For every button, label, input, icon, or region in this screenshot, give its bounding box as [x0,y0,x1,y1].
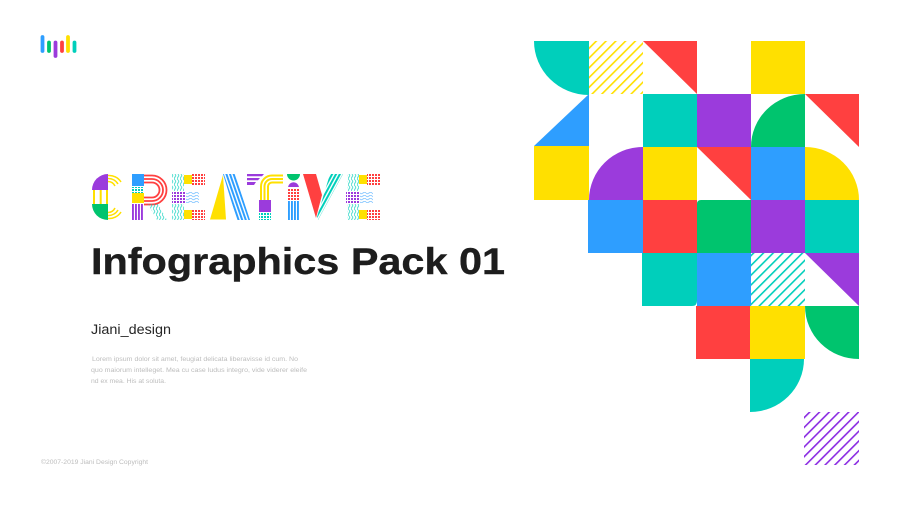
letter A [210,174,250,220]
purple quarter circle [589,147,643,200]
red square [643,200,697,253]
body paragraph [91,356,307,385]
red triangle [805,94,859,147]
letter C [92,174,121,220]
blue triangle [534,94,589,146]
blue square [751,147,805,200]
teal square [805,200,859,253]
teal square [643,94,697,147]
yellow square [643,147,697,200]
blue square [588,200,643,253]
green quarter circle [751,94,805,147]
letter I [287,174,300,220]
logo: colored bars [42,37,74,56]
purple triangle [805,253,859,306]
body paragraph: quo maiorum intelleget. Mea cu case ludus integro, vide viderer eleife [91,367,307,374]
letter E [346,174,380,220]
title: Infographics Pack 01 [91,240,505,282]
author name: Jiani_design [91,322,171,337]
red triangle [697,147,751,200]
letter R [132,174,167,220]
yellow square [751,41,805,94]
decorative word: CREATIVE [92,174,380,220]
yellow quarter circle [805,147,859,200]
body paragraph: Lorem ipsum dolor sit amet, feugiat delicata liberavisse id cum. No [92,356,298,363]
purple square [751,200,805,253]
teal quarter circle [750,359,804,412]
purple square [697,94,751,147]
teal striped square [751,253,805,306]
body paragraph: nd ex mea. His at soluta. [91,378,166,385]
geometric mosaic [534,41,859,465]
blue square [697,253,751,306]
yellow striped square [589,41,643,94]
letter V [303,174,343,220]
copyright: ©2007-2019 Jiani Design Copyright [41,458,148,466]
teal quarter circle [534,41,589,95]
letter E [172,174,205,220]
letter T [247,174,283,220]
red triangle [643,41,697,94]
yellow square [750,306,805,359]
green square [697,200,751,253]
teal square [642,253,697,306]
yellow square [534,146,589,200]
red square [696,306,750,359]
green quarter circle [805,306,859,359]
purple striped square [804,412,859,465]
